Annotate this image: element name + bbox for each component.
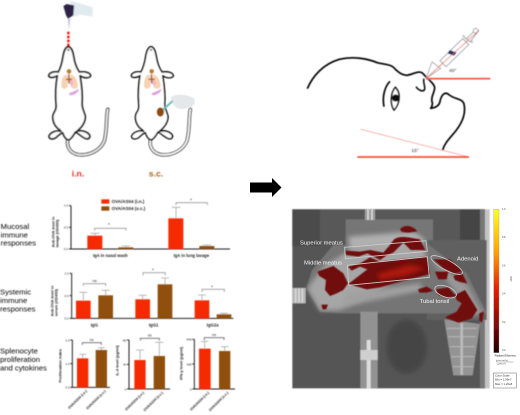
bar chart: systemic IgG subclasses: IgG2a (207, 322, 219, 327)
bar chart: mucosal IgA: lavage (OD450) (56, 219, 60, 247)
label: Superior meatus: Superior meatus (300, 241, 343, 247)
colour scale legend: Color Scale (495, 373, 510, 377)
bar chart: systemic IgG subclasses: * (211, 284, 213, 289)
panel: fluorescence image of nasal cast (292, 208, 517, 388)
heatmap: fluorescence signal regions (317, 226, 484, 323)
bar chart: systemic IgG subclasses: 0.5 (65, 294, 69, 298)
label: Middle meatus: Middle meatus (304, 261, 342, 267)
heading: systemic immune responses: responses (0, 304, 35, 313)
illustration: head outline (307, 58, 465, 150)
label: Adenoid: Adenoid (457, 257, 478, 263)
bar chart: IL-4 level (115, 334, 170, 412)
angle lines: 15 degrees (357, 129, 469, 157)
bar chart: systemic IgG subclasses: Anti-OVA level in (50, 285, 54, 316)
bar chart: mucosal IgA (51, 197, 230, 258)
heatmap: bright signal core (377, 265, 425, 280)
heading: systemic immune responses: immune (0, 296, 27, 305)
bar chart: mucosal IgA: Anti-OVA level in (51, 216, 55, 247)
bar chart: mucosal IgA: IgA in lung lavage (174, 253, 210, 258)
illustration: mouse, intranasal (49, 47, 108, 155)
colour scale legend: (p/sec/cm²/sr) (496, 359, 508, 362)
illustration: eye and brow (383, 81, 399, 110)
bar chart: systemic IgG subclasses: 0.0 (65, 317, 69, 321)
heading: mucosal immune responses: responses (1, 239, 36, 248)
icon: hand with dropper (63, 1, 93, 30)
colour scale legend: Radiant Efficiency (495, 353, 517, 357)
bar chart: mucosal IgA: 0.0 (64, 247, 68, 251)
colour scale legend: x10⁸ (509, 276, 513, 281)
bar chart: IFN-gamma level: IFN-γ level (pg/ml) (180, 346, 184, 380)
heading: mucosal immune responses: Mucosal (1, 222, 29, 231)
bar chart: mucosal IgA: 0.5 (64, 225, 68, 229)
panel: mouse immunisation routes (49, 1, 194, 178)
legend: OVA/AS04 (i.n.) (112, 199, 145, 204)
bar chart: IFN-gamma level (180, 333, 235, 412)
annotation: region outlines (345, 241, 465, 301)
heading: splenocyte proliferation and cytokines: Splenocyte (0, 347, 38, 356)
colour scale legend: 0.8 (502, 236, 506, 239)
bar chart: IFN-gamma level: ns (212, 333, 216, 337)
colour scale legend: 0.2 (502, 349, 506, 352)
label: 15 degrees: 15° (411, 148, 419, 154)
icon: subcutaneous injection site (157, 107, 164, 117)
label: i.n.: i.n. (72, 168, 84, 178)
bar chart: IL-4 level: 80 (123, 338, 127, 342)
bar chart: IFN-gamma level: OVA/AS04 (s.c.) (208, 391, 229, 412)
photo: nasal cast on grey background (292, 209, 490, 388)
heading: splenocyte proliferation and cytokines: proliferation (0, 355, 40, 364)
bar chart: systemic IgG subclasses: IgG (91, 322, 99, 327)
bar chart: IL-4 level: 40 (123, 363, 127, 367)
icon: nasal spray syringe (426, 28, 479, 78)
label: Tubal tonsil: Tubal tonsil (420, 299, 449, 305)
bar chart: IL-4 level: ns (148, 334, 152, 338)
bar chart: mucosal IgA: 1.0 (64, 204, 68, 208)
bar chart: proliferation index: OVA/AS04 (i.n.) (67, 389, 88, 410)
bar chart: mucosal IgA: * (108, 222, 110, 227)
heading: splenocyte proliferation and cytokines: and cytokines (0, 363, 47, 372)
bar chart: IL-4 level: OVA/AS04 (s.c.) (143, 391, 164, 412)
colour scale legend: (μW/cm²) (497, 362, 506, 365)
bar chart: mucosal IgA: IgA in nasal wash (93, 253, 128, 258)
bar chart: proliferation index: 1.0 (66, 362, 70, 366)
angle line: 40 degrees horizontal (426, 76, 490, 81)
colour scale legend: 0.2 (502, 321, 506, 324)
bar chart: systemic IgG subclasses: serum (OD450) (55, 288, 59, 316)
legend: OVA/AS04 (s.c.) (112, 206, 146, 211)
bar chart: proliferation index: 2.0 (66, 338, 70, 342)
heading: mucosal immune responses: immune (1, 230, 28, 239)
bar chart: IFN-gamma level: 400 (187, 362, 192, 366)
bar chart: systemic IgG subclasses: * (152, 267, 154, 272)
colour scale legend: 1.0 (502, 208, 506, 211)
bar chart: IL-4 level: OVA/AS04 (i.n.) (124, 391, 145, 412)
panel: immune response charts (0, 197, 235, 412)
bar chart: IFN-gamma level: OVA/AS04 (i.n.) (189, 391, 210, 412)
bar chart: proliferation index: ns (90, 338, 94, 342)
colour scale legend: Max = 1.20e8 (495, 382, 513, 386)
legend (101, 199, 146, 211)
bar chart: proliferation index (58, 338, 110, 410)
bar chart: proliferation index: 0.0 (66, 386, 70, 390)
icon: hand with syringe (163, 95, 194, 109)
colour scale legend: 0.4 (502, 293, 506, 296)
bar chart: IL-4 level: 0 (125, 387, 127, 391)
bar chart: systemic IgG subclasses: IgG1 (149, 322, 159, 327)
bar chart: IFN-gamma level: 800 (187, 338, 192, 342)
arrow: leads to nasal delivery results (250, 178, 282, 197)
label: s.c.: s.c. (149, 168, 163, 178)
colour scale legend: Min = 1.99e7 (495, 378, 512, 382)
bar chart: proliferation index: OVA/AS04 (s.c.) (85, 389, 107, 410)
colour scale legend (493, 208, 517, 388)
label: 40 degrees: 40° (449, 68, 457, 74)
heading: systemic immune responses: Systemic (0, 288, 31, 297)
bar chart: IFN-gamma level: 0 (190, 387, 192, 391)
bar chart: systemic IgG subclasses: ns (93, 278, 97, 283)
illustration: mouse, subcutaneous (131, 47, 190, 155)
dashed red line: intranasal route (65, 32, 72, 47)
bar chart: proliferation index: Proliferation index (58, 348, 62, 383)
bar chart: systemic IgG subclasses: 1.0 (65, 272, 69, 276)
panel: head profile with nasal spray angle (307, 28, 490, 157)
colour scale legend: 0.6 (502, 264, 506, 267)
bar chart: systemic IgG subclasses (50, 267, 233, 327)
bar chart: mucosal IgA: * (190, 197, 192, 202)
illustration: nostril (416, 79, 425, 91)
bar chart: IL-4 level: IL-4 level (pg/ml) (115, 345, 119, 376)
